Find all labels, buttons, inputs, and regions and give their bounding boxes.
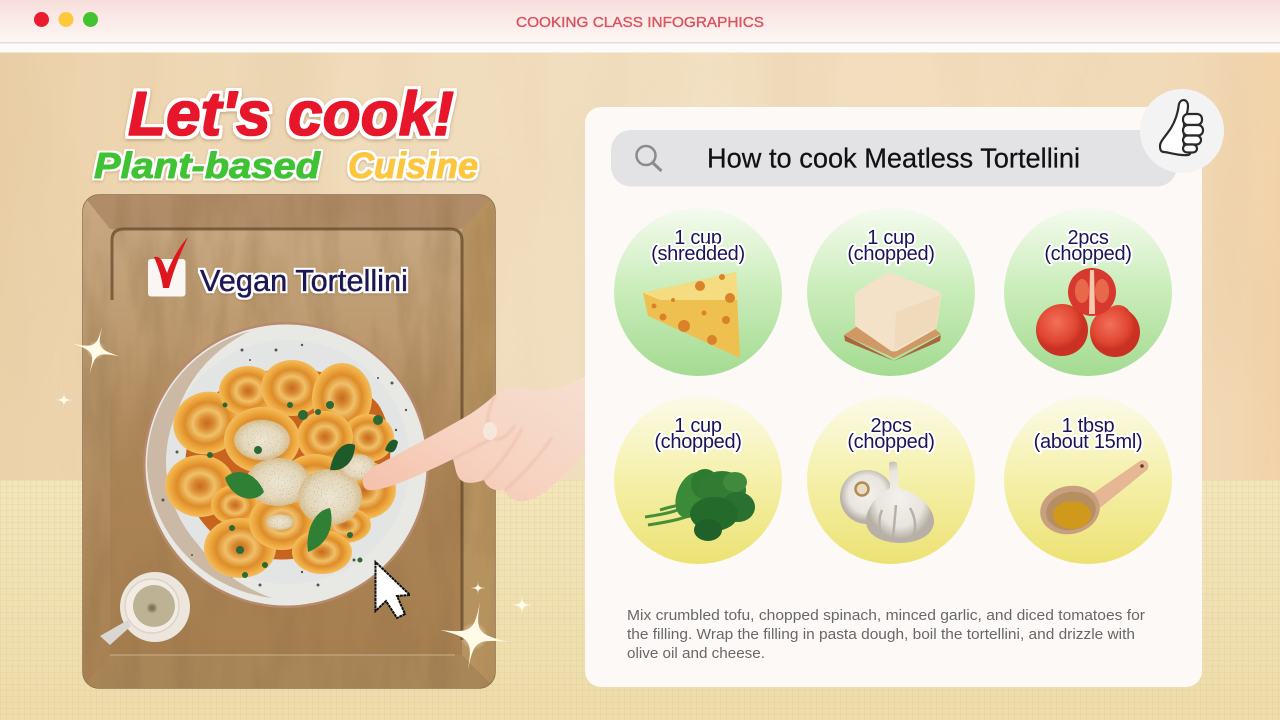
plate <box>143 322 429 608</box>
ingredient: tomatoes: 2pcs <box>1067 227 1109 249</box>
title: Let's cook!: Let's cook! <box>128 80 454 149</box>
ingredient: spinach: 1 cup <box>674 415 722 437</box>
search heading: How to cook Meatless Tortellini <box>707 142 1080 174</box>
icon: wooden spoon with oil <box>1036 460 1148 540</box>
basil leaves <box>207 401 398 578</box>
ingredient: tofu: (chopped) <box>847 243 935 265</box>
coffee cup on saucer <box>100 572 190 645</box>
ingredient: spinach: (chopped) <box>654 431 742 453</box>
pointing hand <box>363 376 585 501</box>
window title bar <box>0 0 1280 52</box>
thumbs-up badge <box>1140 89 1224 173</box>
ingredient: cheese: (shredded) <box>651 243 745 265</box>
icon: magnifying glass <box>636 146 662 171</box>
icon: tomatoes <box>1036 268 1140 357</box>
sparkles <box>55 321 533 676</box>
wooden serving board <box>83 195 495 688</box>
tortellini pasta pieces <box>164 360 396 578</box>
grated cheese <box>234 420 376 530</box>
instructions text <box>627 607 1145 662</box>
plate of tortellini <box>143 322 429 608</box>
ingredient: tomatoes: (chopped) <box>1044 243 1132 265</box>
ingredient: olive oil <box>1004 396 1172 564</box>
ingredient: cheese <box>614 208 782 376</box>
ingredient: tomatoes <box>1004 208 1172 376</box>
ingredient: olive oil: (about 15ml) <box>1034 431 1142 453</box>
icon: garlic bulbs <box>840 462 934 543</box>
panel: recipe card <box>585 107 1202 687</box>
window control: red dot <box>34 12 49 27</box>
instructions text: olive oil and cheese. <box>627 645 765 662</box>
ingredient: spinach <box>614 396 782 564</box>
mouse cursor <box>376 562 410 618</box>
window control: green dot <box>83 12 98 27</box>
dish name: Vegan Tortellini: Vegan Tortellini <box>200 263 408 298</box>
icon: tofu cube on wooden board <box>844 273 941 361</box>
ingredient: cheese: 1 cup <box>674 227 722 249</box>
background: woven cloth <box>0 480 1280 720</box>
ingredient: garlic: (chopped) <box>847 431 935 453</box>
ingredient: garlic: 2pcs <box>870 415 912 437</box>
icon: cheese wedge <box>643 272 740 358</box>
icon: spinach bunch <box>645 467 755 541</box>
subtitle: Plant-based Cuisine: Cuisine <box>348 145 478 186</box>
search bar <box>611 130 1177 186</box>
window control: yellow dot <box>58 12 74 27</box>
instructions text: Mix crumbled tofu, chopped spinach, minced garlic, and diced tomatoes for <box>627 607 1145 624</box>
instructions text: the filling. Wrap the filling in pasta dough, boil the tortellini, and drizzle with <box>627 626 1135 643</box>
background: wood table <box>0 52 1280 482</box>
window title: COOKING CLASS INFOGRAPHICS <box>516 14 764 31</box>
ingredient: tofu: 1 cup <box>867 227 915 249</box>
subtitle: Plant-based Cuisine: Plant-based <box>94 145 321 186</box>
checkbox icon with red check <box>148 237 188 296</box>
ingredient: olive oil: 1 tbsp <box>1062 415 1115 437</box>
ingredient: tofu <box>807 208 975 376</box>
subtitle: Plant-based Cuisine <box>94 145 478 186</box>
sauce <box>185 369 390 559</box>
ingredient: garlic <box>807 396 975 564</box>
